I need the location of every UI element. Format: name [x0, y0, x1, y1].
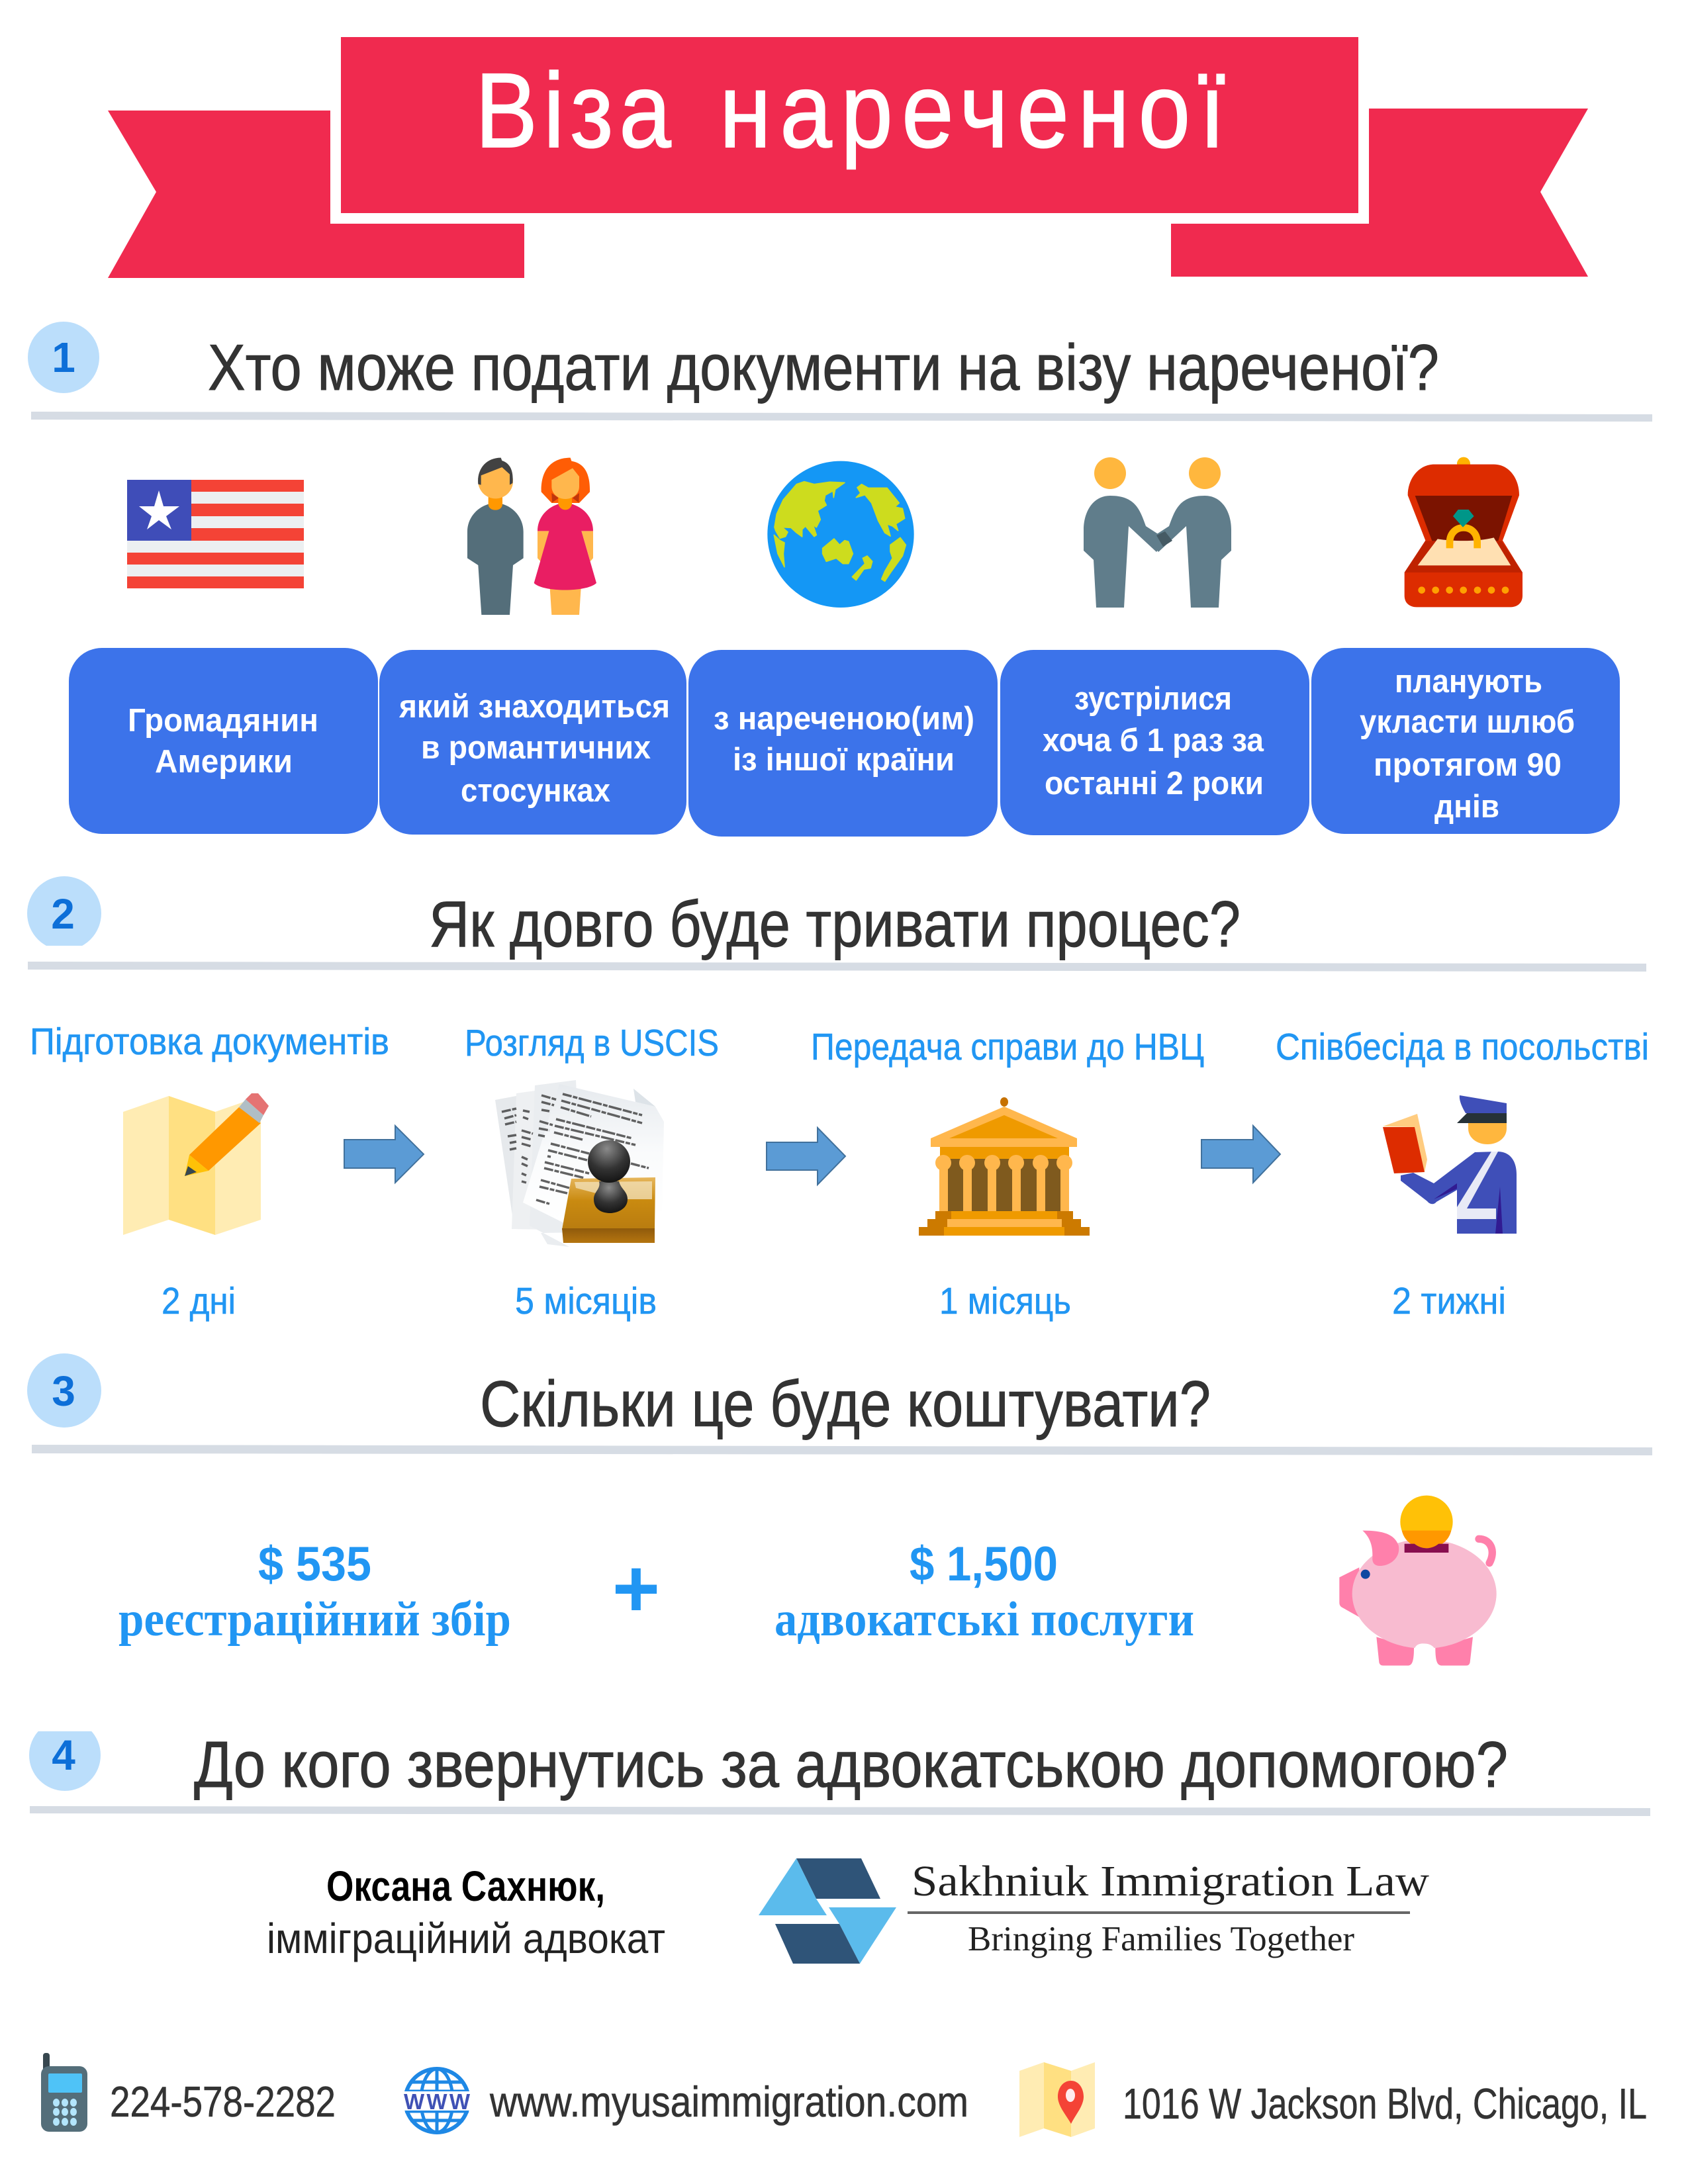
icon: consular officer: [1383, 1095, 1517, 1234]
icon: couple: [467, 458, 596, 615]
step label: interview: Співбесіда в посольстві: [1276, 1026, 1649, 1068]
step label: USCIS: Розгляд в USCIS: [465, 1022, 719, 1064]
card: met in person: [1000, 650, 1309, 835]
card: met in person: останні 2 роки: [1045, 766, 1264, 801]
card: met in person: хоча б 1 раз за: [1043, 723, 1264, 758]
icon: handshake: [1084, 457, 1231, 608]
card: citizen: [69, 648, 378, 834]
card: fiance abroad: [688, 650, 998, 837]
fee: filing: [118, 1537, 511, 1647]
website: www.myusaimmigration.com: [489, 2077, 968, 2126]
icon: globe: [767, 461, 914, 608]
fee: attorney: $ 1,500: [910, 1537, 1058, 1591]
duration: 1 month: 1 місяць: [939, 1280, 1071, 1322]
step label: NVC: Передача справи до НВЦ: [811, 1026, 1204, 1068]
fee: attorney: [774, 1537, 1194, 1647]
card: citizen: Громадянин: [128, 703, 318, 739]
card: plan to marry: протягом 90: [1374, 747, 1562, 783]
title ribbon banner: [108, 37, 1588, 278]
icon: phone: [41, 2053, 87, 2132]
card: fiance abroad: із іншої країни: [733, 742, 955, 778]
section 4 number badge: [29, 1731, 101, 1791]
fee: filing: $ 535: [258, 1537, 371, 1591]
card: fiance abroad: з нареченою(им): [714, 701, 974, 737]
section 4 number badge: 4: [52, 1731, 75, 1779]
duration: 2 days: 2 дні: [162, 1280, 236, 1322]
duration: 2 weeks: 2 тижні: [1392, 1280, 1506, 1322]
card: plan to marry: укласти шлюб: [1360, 704, 1575, 740]
icon: flag: [127, 480, 304, 588]
section 1 heading: Хто може подати документи на візу нареченої?: [208, 331, 1439, 404]
title: Віза: [475, 52, 671, 169]
fee: filing: реєстраційний збір: [118, 1592, 511, 1647]
icon: www globe: [401, 2069, 473, 2132]
card: relationship: [379, 650, 686, 835]
card: plan to marry: планують: [1395, 664, 1542, 700]
icon: temple building: [919, 1097, 1090, 1236]
arrow: [767, 1128, 845, 1185]
arrow: [344, 1126, 424, 1183]
section 2 number badge: [27, 876, 101, 950]
icon: www globe: WWW: [404, 2089, 471, 2114]
fee: attorney: адвокатські послуги: [774, 1592, 1194, 1647]
card: citizen: Америки: [155, 744, 293, 780]
firm logo: [759, 1857, 1429, 1964]
card: relationship: в романтичних: [421, 730, 651, 766]
attorney name: імміграційний адвокат: [267, 1915, 665, 1962]
attorney name: [267, 1862, 665, 1962]
icon: piggy bank: [1339, 1496, 1497, 1666]
section 3 number badge: [27, 1353, 101, 1428]
firm slogan: Bringing Families Together: [968, 1920, 1354, 1958]
card: plan to marry: [1311, 648, 1620, 834]
step label: preparation: Підготовка документів: [30, 1021, 389, 1063]
section 3 number badge: 3: [52, 1367, 75, 1415]
icon: map with pencil: [123, 1093, 269, 1235]
arrow: [1201, 1126, 1280, 1183]
card: relationship: який знаходиться: [399, 689, 670, 725]
icon: map pin: [1019, 2062, 1095, 2137]
card: met in person: зустрілися: [1074, 681, 1232, 717]
section 1 number badge: [28, 322, 99, 393]
plus sign: +: [612, 1543, 660, 1635]
title: нареченої: [720, 52, 1225, 169]
card: relationship: стосунках: [461, 773, 610, 809]
duration: 5 months: 5 місяців: [515, 1280, 657, 1322]
attorney name: Оксана Сахнюк,: [326, 1862, 605, 1910]
section 2 heading: Як довго буде тривати процес?: [429, 887, 1241, 960]
phone number: 224-578-2282: [110, 2077, 336, 2126]
section 1 number badge: 1: [52, 334, 75, 381]
firm name: Sakhniuk Immigration Law: [912, 1857, 1429, 1905]
section 4 heading: До кого звернутись за адвокатською допомогою?: [194, 1728, 1508, 1801]
section 2 number badge: 2: [51, 890, 75, 938]
section 3 heading: Скільки це буде коштувати?: [480, 1367, 1211, 1440]
icon: documents with stamp: [495, 1080, 664, 1247]
card: plan to marry: днів: [1434, 789, 1499, 825]
icon: ring box: [1405, 457, 1523, 607]
title: [475, 52, 1225, 169]
